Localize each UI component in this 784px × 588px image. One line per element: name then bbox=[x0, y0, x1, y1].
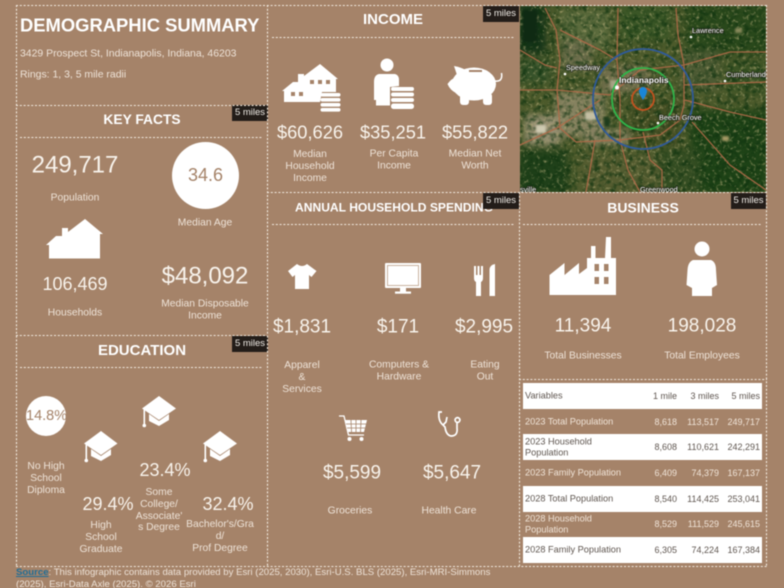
row: 2028 family population: 2028 Family Population bbox=[525, 545, 621, 555]
source note bbox=[16, 567, 491, 588]
label: computers and hardware: Hardware bbox=[377, 372, 421, 382]
ring: 3 mile bbox=[612, 68, 674, 130]
icon: stethoscope bbox=[437, 410, 462, 438]
label: total employees: Total Employees bbox=[664, 351, 740, 362]
row: 2023 household population bbox=[523, 434, 762, 460]
stat: median age circle bbox=[172, 142, 239, 209]
label: some college bbox=[136, 487, 182, 533]
row: 2023 family population: 167,137 bbox=[727, 468, 760, 478]
label: per capita income: Per Capita bbox=[370, 149, 418, 160]
stat: no high school circle bbox=[26, 396, 66, 436]
row: 2028 household population: 2028 Household bbox=[525, 513, 592, 523]
label: no high school diploma bbox=[27, 461, 66, 496]
map labels: Lawrence bbox=[692, 26, 724, 35]
row: 2023 family population: 74,379 bbox=[691, 468, 719, 478]
heading: education: EDUCATION bbox=[98, 342, 186, 359]
label: no high school diploma: No High bbox=[27, 461, 65, 472]
stat: total employees: 198,028 bbox=[668, 316, 736, 336]
label: high school graduate: School bbox=[85, 532, 117, 543]
label: median age: Median Age bbox=[178, 218, 232, 229]
row: 2023 household population: 110,621 bbox=[687, 442, 719, 452]
map labels bbox=[520, 26, 766, 194]
label: eating out: Eating bbox=[470, 360, 500, 371]
label: median household income bbox=[285, 149, 335, 183]
rings note: Rings: 1, 3, 5 mile radii bbox=[20, 70, 126, 81]
icon: fork and knife bbox=[473, 264, 496, 297]
label: high school graduate: High bbox=[90, 520, 112, 531]
heading: annual household spending: ANNUAL HOUSEHOLD SPENDING bbox=[295, 200, 493, 214]
panel: key facts bbox=[32, 104, 269, 322]
label: bachelor or graduate: Bachelor's/Gra bbox=[186, 519, 254, 530]
icon: graduation cap some college bbox=[142, 396, 176, 428]
icon: person with coins bbox=[373, 58, 415, 110]
badge: 5 miles bbox=[232, 105, 268, 121]
label: median household income: Median bbox=[293, 149, 327, 160]
map labels: Cumberland bbox=[726, 70, 766, 79]
panel: annual household spending bbox=[272, 192, 520, 517]
table header row bbox=[523, 383, 762, 409]
row: 2023 family population: 6,409 bbox=[654, 468, 677, 478]
row: 2028 family population: 6,305 bbox=[654, 545, 677, 555]
icon: graduation cap high school bbox=[84, 430, 118, 463]
heading: key facts: KEY FACTS bbox=[103, 112, 181, 127]
icon: house bbox=[46, 218, 104, 260]
label: groceries: Groceries bbox=[328, 506, 372, 517]
panel: location map bbox=[519, 5, 767, 193]
stat: median disposable income: $48,092 bbox=[162, 262, 248, 290]
address: 3429 Prospect St, Indianapolis, Indiana, 46203 bbox=[20, 49, 236, 60]
row: 2028 family population: 167,384 bbox=[727, 545, 760, 555]
label: high school graduate bbox=[80, 520, 122, 554]
map place dots bbox=[564, 36, 726, 124]
icon: person bbox=[686, 240, 718, 297]
panel: demographic summary header bbox=[20, 14, 260, 81]
roads bbox=[520, 8, 766, 192]
row: 2028 household population: 111,529 bbox=[688, 519, 719, 529]
badge: 5 miles: 5 miles bbox=[486, 195, 516, 206]
row: 2023 household population: 242,291 bbox=[727, 442, 760, 452]
label: median household income: Income bbox=[293, 172, 327, 183]
label: median net worth: Median Net bbox=[449, 149, 501, 160]
stat: no high school circle: 14.8% bbox=[26, 408, 67, 424]
row: 2028 household population bbox=[525, 513, 760, 535]
stat: population: 249,717 bbox=[32, 152, 118, 178]
icon: computer monitor bbox=[384, 262, 422, 294]
label: no high school diploma: Diploma bbox=[27, 484, 65, 495]
label: bachelor or graduate: d/ bbox=[216, 531, 224, 542]
table header row: 5 miles bbox=[731, 391, 760, 401]
row: 2028 household population: Population bbox=[525, 524, 568, 534]
label: median household income: Household bbox=[285, 161, 335, 172]
label: no high school diploma: School bbox=[30, 473, 62, 484]
label: per capita income: Income bbox=[377, 160, 411, 172]
stat: eating out: $2,995 bbox=[455, 316, 513, 338]
label: apparel and services: Services bbox=[282, 383, 322, 394]
badge: 5 miles bbox=[731, 193, 766, 209]
stat: median age circle: 34.6 bbox=[188, 165, 223, 185]
label: apparel and services: & bbox=[299, 372, 305, 383]
label: some college: s Degree bbox=[138, 522, 180, 533]
label: median disposable income bbox=[161, 298, 249, 322]
stat: total businesses: 11,394 bbox=[555, 316, 611, 336]
label: apparel and services bbox=[282, 360, 322, 394]
label: some college: College/ bbox=[140, 499, 178, 510]
row: 2023 total population bbox=[525, 417, 760, 427]
label: per capita income bbox=[370, 148, 419, 172]
panel: business bbox=[544, 192, 767, 362]
badge: 5 miles bbox=[483, 193, 519, 209]
stat: groceries: $5,599 bbox=[323, 462, 381, 484]
row: 2023 total population: 113,517 bbox=[687, 417, 719, 427]
row: 2023 total population: 2023 Total Population bbox=[525, 417, 613, 427]
label: eating out bbox=[470, 360, 500, 382]
map labels: Speedway bbox=[566, 63, 600, 72]
panel: income bbox=[276, 5, 520, 183]
stat: some college: 23.4% bbox=[139, 460, 191, 480]
row: 2028 household population: 8,529 bbox=[654, 519, 677, 529]
label: health care: Health Care bbox=[422, 506, 476, 517]
badge: 5 miles: 5 miles bbox=[235, 338, 265, 349]
label: computers and hardware: Computers & bbox=[369, 360, 429, 371]
row: 2028 total population: 114,425 bbox=[687, 494, 719, 504]
row: 2028 total population: 2028 Total Population bbox=[525, 494, 613, 504]
row: 2028 family population: 74,224 bbox=[691, 545, 719, 555]
icon: house with coins bbox=[282, 64, 342, 112]
label: population: Population bbox=[51, 193, 99, 204]
stat: households: 106,469 bbox=[42, 274, 108, 294]
stat: computers and hardware: $171 bbox=[377, 316, 419, 338]
icon: graduation cap bachelor bbox=[202, 430, 238, 463]
icon: piggy bank bbox=[447, 66, 504, 106]
label: median disposable income: Median Disposable bbox=[161, 299, 249, 310]
badge: 5 miles: 5 miles bbox=[733, 195, 764, 206]
ring: 5 mile bbox=[593, 49, 693, 149]
table header row: 3 miles bbox=[690, 391, 719, 401]
source note: Source: This infographic contains data provided by Esri (2025, 2030), Esri-U.S. BLS (2025), Esri-MRI-Simmons bbox=[16, 567, 490, 578]
stat: high school graduate: 29.4% bbox=[82, 494, 134, 514]
icon: shopping cart bbox=[338, 414, 368, 442]
row: 2023 total population: 8,618 bbox=[654, 417, 677, 427]
label: bachelor or graduate bbox=[186, 519, 254, 554]
stat: bachelor or graduate: 32.4% bbox=[202, 494, 254, 514]
stat: per capita income: $35,251 bbox=[360, 122, 426, 142]
label: median net worth bbox=[448, 148, 502, 172]
panel: education bbox=[25, 335, 269, 554]
icon: t-shirt bbox=[288, 264, 317, 290]
label: eating out: Out bbox=[477, 372, 493, 382]
map pin bbox=[639, 87, 647, 100]
row: 2028 household population: 245,615 bbox=[727, 519, 760, 529]
table: population by ring bbox=[522, 382, 763, 564]
label: households: Households bbox=[48, 308, 102, 319]
row: 2023 family population: 2023 Family Population bbox=[525, 468, 621, 478]
badge: 5 miles bbox=[232, 336, 268, 352]
stat: median net worth: $55,822 bbox=[442, 122, 508, 142]
label: some college: Some bbox=[146, 487, 172, 498]
stat: health care: $5,647 bbox=[423, 462, 481, 484]
heading: business: BUSINESS bbox=[607, 200, 679, 216]
row: 2023 household population: 8,608 bbox=[654, 442, 677, 452]
heading: income: INCOME bbox=[363, 11, 423, 28]
map labels: Beech Grove bbox=[659, 113, 702, 122]
row: 2028 total population: 8,540 bbox=[654, 494, 677, 504]
label: median net worth: Worth bbox=[461, 160, 489, 172]
row: 2023 household population: Population bbox=[525, 447, 568, 457]
badge: 5 miles: 5 miles bbox=[486, 8, 516, 19]
row: 2028 total population: 253,041 bbox=[727, 494, 760, 504]
stat: median household income: $60,626 bbox=[277, 122, 343, 142]
label: median disposable income: Income bbox=[188, 310, 222, 322]
label: total businesses: Total Businesses bbox=[544, 351, 622, 362]
label: high school graduate: Graduate bbox=[80, 543, 122, 554]
row: 2028 total population bbox=[523, 486, 762, 512]
icon: factory bbox=[548, 236, 617, 296]
ring: 1 mile bbox=[632, 88, 654, 110]
row: 2023 family population bbox=[525, 468, 760, 478]
row: 2023 total population: 249,717 bbox=[727, 417, 760, 427]
title: DEMOGRAPHIC SUMMARY bbox=[20, 14, 259, 36]
label: bachelor or graduate: Prof Degree bbox=[192, 542, 248, 553]
stat: apparel and services: $1,831 bbox=[273, 316, 331, 338]
row: 2028 family population bbox=[523, 537, 762, 563]
table header row: 1 mile bbox=[653, 391, 677, 401]
label: some college: Associate' bbox=[136, 510, 182, 522]
badge: 5 miles: 5 miles bbox=[235, 107, 265, 118]
badge: 5 miles bbox=[483, 6, 519, 22]
label: apparel and services: Apparel bbox=[284, 360, 320, 371]
label: computers and hardware bbox=[369, 360, 430, 382]
row: 2023 household population: 2023 Household bbox=[525, 436, 592, 446]
map labels: Indianapolis bbox=[619, 75, 669, 85]
table header row: Variables bbox=[525, 391, 563, 401]
